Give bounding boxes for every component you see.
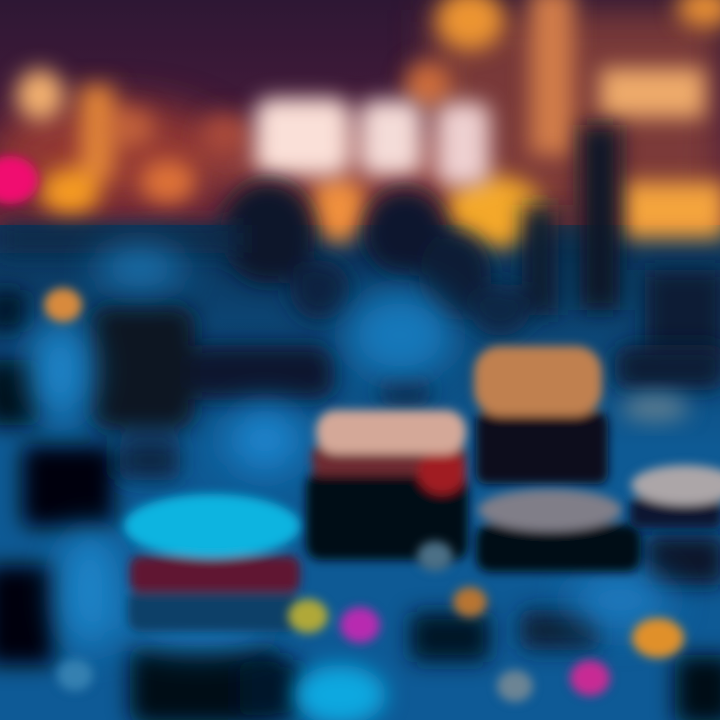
drum: pale pink and red (306, 410, 468, 560)
pink neon light (0, 156, 38, 204)
drum: white-grey top at right edge (630, 465, 720, 528)
light blue highlights (30, 248, 670, 650)
small coloured lights (44, 288, 684, 702)
bright white sign (255, 98, 490, 186)
small grey disc (621, 394, 689, 422)
dark towers and domes (0, 125, 720, 360)
orange city lights (16, 0, 720, 248)
centre city glow (210, 120, 470, 220)
right city glow (430, 10, 720, 220)
drum: orange top (474, 346, 608, 484)
dark silhouette blocks (0, 290, 720, 720)
background blue field (0, 225, 720, 720)
bright cyan pool at bottom (294, 665, 386, 720)
left city glow (0, 100, 230, 200)
background sky (0, 0, 720, 250)
drum: grey top (476, 489, 641, 572)
drum: cyan top with red band (124, 494, 300, 632)
skyline glow (0, 10, 720, 220)
